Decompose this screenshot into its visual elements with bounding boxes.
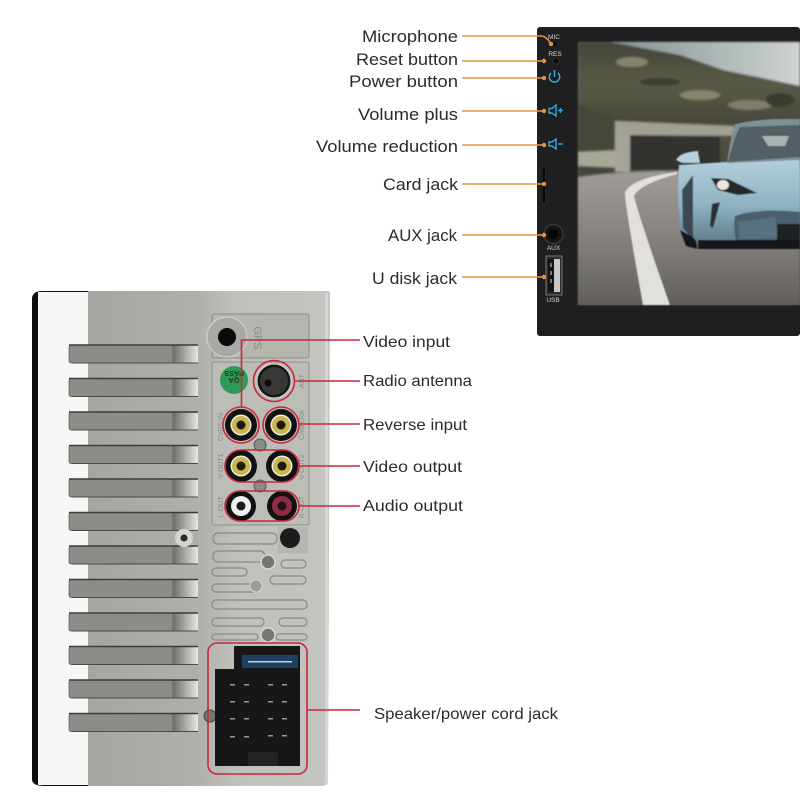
icon: volume plus <box>549 105 563 116</box>
callout: U disk jack <box>372 269 546 288</box>
icon: power <box>549 70 560 82</box>
callout: Card jack <box>383 175 546 194</box>
icon: AUX jack <box>544 224 563 244</box>
speaker power connector <box>215 646 300 766</box>
callout: Reset button <box>356 50 546 69</box>
screen photo: road and sports car <box>578 42 800 305</box>
callout: Radio antenna: Radio antenna <box>363 373 472 390</box>
callout: Speaker/power cord jack: Speaker/power cord jack <box>374 706 559 723</box>
icon: reset hole <box>553 58 559 64</box>
connector labels <box>218 373 306 518</box>
screw: between RCAs <box>254 439 266 492</box>
callout: Volume reduction: Volume reduction <box>316 137 458 156</box>
callout: Volume plus: Volume plus <box>358 105 458 124</box>
rear callouts <box>208 334 559 774</box>
connector labels: V-OUT2 <box>299 454 306 480</box>
callout: Microphone <box>362 27 553 46</box>
lower vent cut-outs <box>212 533 307 640</box>
car <box>676 119 800 249</box>
callout: Reverse input: Reverse input <box>363 417 468 434</box>
RCA: audio left <box>226 491 256 521</box>
callout: Video output: Video output <box>363 459 463 476</box>
side edge <box>32 291 88 786</box>
road line <box>625 172 677 305</box>
GPS label: GPS <box>251 326 263 350</box>
callout: Card jack: Card jack <box>383 175 459 194</box>
callout: Video input: Video input <box>363 334 451 351</box>
metal plate <box>88 291 330 786</box>
connector labels: L-OUT <box>218 496 225 518</box>
connector labels: R-OUT <box>299 495 306 518</box>
connector labels: V-OUT1 <box>218 453 225 479</box>
callout: AUX jack <box>388 226 546 245</box>
label: RES: RES <box>548 51 562 58</box>
front callouts <box>316 27 553 288</box>
callout: Reverse input <box>263 407 468 443</box>
callout: Speaker/power cord jack <box>208 643 559 774</box>
panel: rear housing <box>32 291 330 786</box>
inset panel: AV connectors <box>212 362 309 525</box>
callout: Volume reduction <box>316 137 546 156</box>
GPS jack <box>207 317 247 357</box>
icon: card slot <box>542 168 546 203</box>
ventilation slots <box>69 345 198 732</box>
icon: volume minus <box>549 139 563 149</box>
screws: lower plate <box>204 555 275 722</box>
RCA: audio right <box>267 491 297 521</box>
callout: Microphone: Microphone <box>362 27 458 46</box>
screw: side mount <box>175 529 193 547</box>
RCA: CVBS in <box>225 409 257 441</box>
callout: Radio antenna <box>254 360 472 402</box>
RCA: video out 2 <box>266 450 298 482</box>
callout: Volume plus <box>358 105 546 124</box>
panel: front head unit <box>537 27 800 336</box>
callout: Audio output <box>225 491 464 521</box>
connector labels: CAMERA <box>299 410 306 440</box>
callout: AUX jack: AUX jack <box>388 226 457 245</box>
callout: Power button <box>349 72 546 91</box>
QC sticker: QA <box>228 376 240 385</box>
QC sticker: PASS <box>224 369 244 378</box>
callout: Video input <box>223 334 451 443</box>
inset panel: GPS <box>212 314 309 358</box>
RCA: camera in <box>265 409 297 441</box>
callout: U disk jack: U disk jack <box>372 269 458 288</box>
callout: Power button: Power button <box>349 72 458 91</box>
connector labels: ANT <box>299 373 306 388</box>
icon: USB port <box>546 256 562 295</box>
callout: Audio output: Audio output <box>363 498 464 515</box>
callout: Video output <box>225 450 463 482</box>
QC sticker <box>220 366 248 394</box>
label: MIC: MIC <box>548 34 560 41</box>
connector labels: CVBS IN <box>218 413 225 441</box>
icon: microphone hole <box>553 42 557 46</box>
label: USB: USB <box>546 297 560 304</box>
antenna socket <box>257 364 291 398</box>
label: AUX: AUX <box>547 245 561 252</box>
RCA: video out 1 <box>225 450 257 482</box>
callout: Reset button: Reset button <box>356 50 458 69</box>
small jack <box>278 527 308 553</box>
